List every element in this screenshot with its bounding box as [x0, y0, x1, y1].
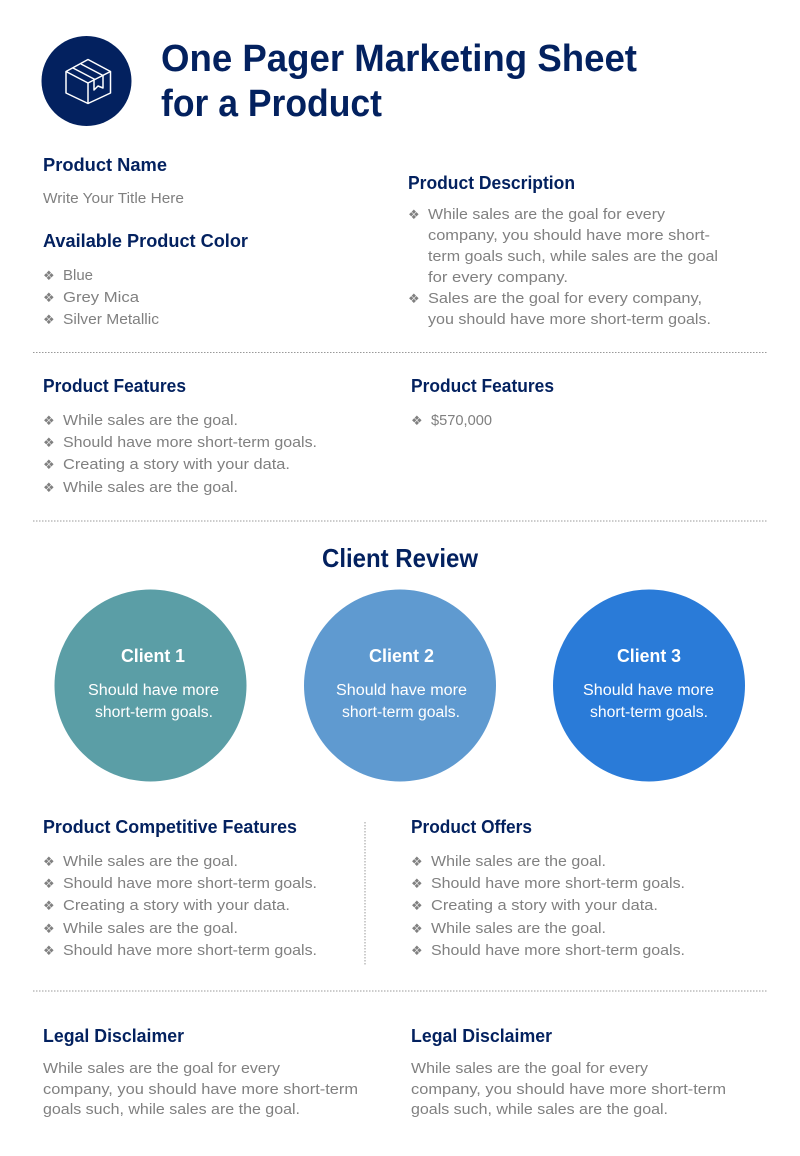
panel: product offers: ❖: [411, 944, 423, 959]
panel: product features left: ❖: [43, 458, 55, 473]
panel: product offers: ❖: [411, 899, 423, 914]
panel: product description: ❖: [408, 208, 420, 223]
title: [161, 38, 637, 125]
panel: product competitive features: Should have more short-term goals.: [63, 875, 317, 892]
panel: product name: Write Your Title Here: [43, 190, 184, 207]
panel: product competitive features: ❖: [43, 855, 55, 870]
panel: product features right: ❖: [411, 414, 423, 429]
panel: legal disclaimer left: company, you should have more short-term: [43, 1081, 358, 1098]
panel: product description: [408, 173, 718, 328]
panel: client 3: short-term goals.: [590, 704, 708, 721]
panel: product competitive features: [43, 817, 317, 959]
panel: product competitive features: ❖: [43, 944, 55, 959]
panel: product offers: ❖: [411, 922, 423, 937]
panel: legal disclaimer right: While sales are the goal for every: [411, 1060, 649, 1077]
panel: product description: Product Description: [408, 173, 575, 193]
panel: product name: Product Name: [43, 155, 167, 175]
panel: client 1: Client 1: [121, 646, 185, 666]
panel: available product color: ❖: [43, 269, 55, 284]
panel: client 1: short-term goals.: [95, 704, 213, 721]
panel: client 2: short-term goals.: [342, 704, 460, 721]
panel: product competitive features: Product Competitive Features: [43, 817, 297, 837]
panel: available product color: [43, 231, 248, 328]
panel: product offers: Should have more short-term goals.: [431, 942, 685, 959]
panel: client 2: Should have more: [336, 682, 467, 699]
panel: product competitive features: ❖: [43, 922, 55, 937]
panel: product features left: ❖: [43, 481, 55, 496]
panel: product features right: [411, 376, 554, 429]
panel: legal disclaimer right: goals such, while sales are the goal.: [411, 1101, 668, 1118]
panel: legal disclaimer right: Legal Disclaimer: [411, 1026, 552, 1046]
panel: available product color: Grey Mica: [63, 289, 140, 306]
panel: available product color: Available Product Color: [43, 231, 248, 251]
panel: client 1: Should have more: [88, 682, 219, 699]
panel: available product color: Silver Metallic: [63, 311, 160, 328]
panel: product competitive features: While sales are the goal.: [63, 853, 238, 870]
panel: client 3: Client 3: [617, 646, 681, 666]
panel: product features left: While sales are the goal.: [63, 412, 238, 429]
title: for a Product: [161, 83, 382, 125]
panel: product description: ❖: [408, 292, 420, 307]
panel: product offers: While sales are the goal.: [431, 853, 606, 870]
panel: product description: While sales are the goal for every: [428, 206, 666, 223]
panel: client 1: [54, 590, 246, 782]
panel: legal disclaimer left: While sales are the goal for every: [43, 1060, 281, 1077]
panel: product features left: Product Features: [43, 376, 186, 396]
panel: product offers: [411, 817, 685, 959]
panel: product competitive features: ❖: [43, 899, 55, 914]
panel: product description: company, you should have more short-: [428, 227, 710, 244]
panel: product name: [43, 155, 184, 207]
panel: product competitive features: Creating a story with your data.: [63, 897, 290, 914]
panel: product features left: While sales are the goal.: [63, 479, 238, 496]
panel: product offers: Product Offers: [411, 817, 532, 837]
panel: product features left: [43, 376, 317, 496]
title: One Pager Marketing Sheet: [161, 38, 637, 80]
panel: product description: for every company.: [428, 269, 568, 286]
panel: legal disclaimer left: goals such, while sales are the goal.: [43, 1101, 300, 1118]
panel: legal disclaimer right: company, you should have more short-term: [411, 1081, 726, 1098]
panel: legal disclaimer left: Legal Disclaimer: [43, 1026, 184, 1046]
panel: available product color: Blue: [63, 267, 93, 284]
panel: legal disclaimer right: [411, 1026, 726, 1118]
panel: product offers: Should have more short-term goals.: [431, 875, 685, 892]
panel: product competitive features: While sales are the goal.: [63, 920, 238, 937]
panel: product features left: Creating a story with your data.: [63, 456, 290, 473]
panel: product offers: ❖: [411, 855, 423, 870]
panel: product competitive features: ❖: [43, 877, 55, 892]
panel: product offers: While sales are the goal.: [431, 920, 606, 937]
panel: product features right: $570,000: [431, 412, 492, 429]
panel: available product color: ❖: [43, 291, 55, 306]
panel: product competitive features: Should have more short-term goals.: [63, 942, 317, 959]
panel: product offers: Creating a story with your data.: [431, 897, 658, 914]
panel: client 3: Should have more: [583, 682, 714, 699]
panel: client 3: [553, 590, 745, 782]
panel: product description: Sales are the goal for every company,: [428, 290, 702, 307]
panel: available product color: ❖: [43, 313, 55, 328]
icon: product box badge: [42, 36, 132, 126]
panel: client 2: Client 2: [369, 646, 434, 666]
panel: legal disclaimer left: [43, 1026, 358, 1118]
panel: product description: you should have more short-term goals.: [428, 311, 711, 328]
panel: product features right: Product Features: [411, 376, 554, 396]
panel: product offers: ❖: [411, 877, 423, 892]
panel: client 2: [304, 590, 496, 782]
panel: product features left: ❖: [43, 436, 55, 451]
panel: product features left: ❖: [43, 414, 55, 429]
heading: client review: Client Review: [322, 543, 479, 573]
panel: product features left: Should have more short-term goals.: [63, 434, 317, 451]
panel: product description: term goals such, while sales are the goal: [428, 248, 718, 265]
